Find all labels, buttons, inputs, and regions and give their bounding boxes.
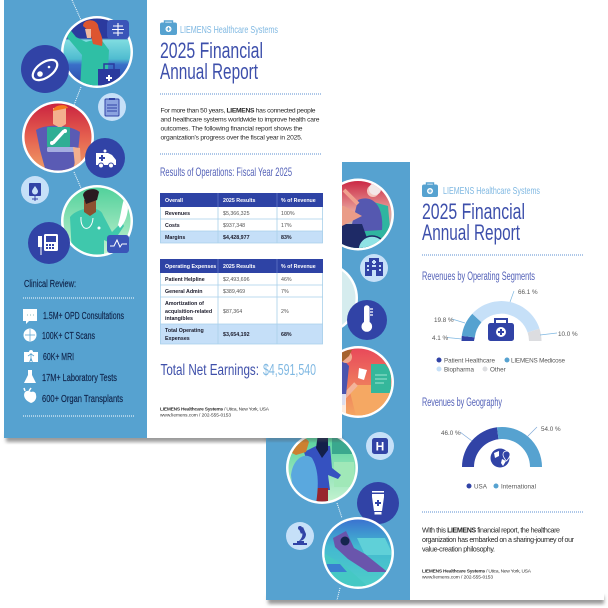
closing paragraph: With this LIEMENS financial report, the healthcare (422, 526, 560, 534)
title (422, 199, 525, 245)
table: overall results: $4,428,977 (223, 235, 250, 241)
illustration: folder and document (342, 346, 394, 418)
heading: geography: Revenues by Geography (422, 397, 502, 409)
table: operating expenses: Operating Expenses (165, 264, 216, 270)
icon: x-ray (107, 20, 129, 39)
icon: clipboard (98, 93, 126, 121)
table: overall results: Revenues (165, 211, 190, 217)
total net earnings: Total Net Earnings: (160, 362, 259, 379)
legend: geography (466, 484, 536, 490)
footer: www.liemens.com / 202-555-0153 (422, 574, 493, 580)
title: 2025 Financial (160, 38, 263, 63)
legend: geography: USA (474, 484, 488, 490)
legend: operating segments (436, 358, 565, 374)
icon: microscope (286, 522, 314, 550)
table: overall results: 83% (281, 235, 292, 241)
intro paragraph: outcomes. The following financial report shows the (160, 126, 303, 132)
icon: ointment tube (357, 482, 399, 524)
icon: ambulance (85, 138, 125, 178)
footer: LIEMENS Healthcare Systems / Utica, New York, USA (160, 406, 270, 412)
table: overall results: 17% (281, 223, 292, 229)
page shadows (6, 434, 604, 604)
chart: revenues by operating segments: 10.0 % (558, 331, 578, 338)
icon: infusion monitor (28, 222, 70, 264)
list: clinical statistics: 1.5M+ OPD Consultations (43, 311, 124, 322)
table: operating expenses: $87,364 (223, 309, 242, 315)
illustration: doctor with stethoscope (61, 185, 133, 257)
icon: speech bubble (23, 309, 37, 324)
table: overall results: % of Revenue (281, 198, 316, 204)
table: operating expenses: 46% (281, 277, 292, 283)
title: Annual Report (160, 59, 258, 84)
icon: hospital (360, 254, 388, 282)
brand header: LIEMENS Healthcare Systems (443, 185, 540, 197)
icon: flask (24, 370, 36, 383)
table: operating expenses: acquisition-related (165, 309, 212, 315)
table: operating expenses: Patient Helpline (165, 277, 205, 283)
table: overall results: Costs (165, 223, 180, 229)
icon: heartbeat chart (107, 235, 129, 253)
table: operating expenses: 2% (281, 309, 289, 315)
list: clinical statistics: 600+ Organ Transplants (42, 394, 123, 405)
intro paragraph: organization's progress over the fiscal year in 2025. (160, 134, 303, 142)
icon: thermometer (347, 300, 387, 340)
legend: operating segments: Patient Healthcare (444, 358, 495, 364)
illustration: pale circle (286, 262, 358, 334)
heading: results of operations: Results of Operations: Fiscal Year 2025 (160, 165, 292, 179)
table: overall results: $5,366,325 (223, 211, 250, 217)
icon: H sign: H (376, 440, 384, 454)
table: operating expenses: Amortization of (165, 301, 204, 307)
brand header (422, 183, 540, 197)
table: operating expenses: Total Operating (165, 328, 204, 334)
table: operating expenses: $2,493,696 (223, 277, 250, 283)
chart: revenues by operating segments: 66.1 % (518, 289, 538, 296)
chart: revenues by operating segments (432, 289, 578, 342)
title: Annual Report (422, 220, 520, 245)
table: overall results: Overall (165, 198, 183, 204)
table: overall results (160, 193, 323, 243)
heading: clinical review: Clinical Review: (24, 279, 76, 290)
illustration: patient lying down (322, 517, 394, 590)
table: overall results: 100% (281, 211, 295, 217)
table: operating expenses: 68% (281, 332, 292, 338)
table: overall results: $937,348 (223, 223, 245, 229)
legend: geography: International (501, 484, 536, 490)
panel: back page blue sidebar (266, 162, 410, 600)
illustration: doctor with medical bag (61, 16, 133, 88)
illustration: couple at doctor (286, 432, 358, 504)
legend: operating segments: LIEMENS Medicose (511, 358, 565, 364)
icon: germ (21, 45, 69, 93)
panel: front page financial report (4, 0, 342, 438)
icon: H sign (366, 432, 394, 460)
footer: LIEMENS Healthcare Systems / Utica, New York, USA (422, 568, 532, 574)
table: overall results: 2025 Results (223, 198, 255, 204)
icon: medical kit (422, 183, 438, 197)
heading: operating segments: Revenues by Operating Segments (422, 271, 535, 283)
panel: front page blue sidebar (4, 0, 147, 438)
list: clinical statistics: 60K+ MRI (43, 352, 74, 363)
title: 2025 Financial (422, 199, 525, 224)
list: clinical statistics: 100K+ CT Scans (42, 331, 95, 342)
brand header (160, 21, 278, 36)
table: operating expenses: General Admin (165, 289, 202, 295)
closing paragraph: organization has embarked on a sharing-journey of our (422, 536, 575, 544)
table: operating expenses: Expenses (165, 336, 190, 342)
icon: blood bag (21, 176, 49, 204)
table: operating expenses: % of Revenue (281, 264, 316, 270)
icon: heart organ (24, 388, 36, 403)
list: clinical statistics (23, 309, 124, 405)
footer: www.liemens.com / 202-555-0153 (160, 412, 231, 418)
legend: operating segments: Other (490, 366, 506, 374)
icon: medical kit (160, 21, 177, 35)
icon: MRI body (24, 350, 38, 364)
icon: medical kit (488, 319, 514, 341)
footer (160, 406, 270, 418)
closing paragraph: value-creation philosophy. (422, 546, 495, 554)
chart: revenues by operating segments: 4.1 % (432, 335, 449, 342)
intro paragraph (160, 108, 320, 142)
footer (422, 568, 532, 580)
table: operating expenses: intangibles (165, 316, 193, 322)
total net earnings: $4,591,540 (263, 362, 316, 379)
table: operating expenses: $3,654,192 (223, 332, 250, 338)
legend: operating segments: Biopharma (444, 366, 474, 374)
intro paragraph: and healthcare systems worldwide to improve health care (160, 116, 320, 124)
chart: revenues by geography (441, 426, 561, 468)
intro paragraph: For more than 50 years, LIEMENS has connected people (160, 108, 316, 114)
chart: revenues by operating segments: 19.8 % (434, 317, 454, 324)
illustration: patient in wheelchair (342, 178, 394, 250)
shadow of front page over back page (266, 436, 342, 441)
table: operating expenses: 7% (281, 289, 289, 295)
table: operating expenses: 2025 Results (223, 264, 255, 270)
icon: brain (24, 328, 36, 342)
chart: revenues by geography: 54.0 % (541, 426, 561, 433)
brand header: LIEMENS Healthcare Systems (180, 24, 278, 36)
chart: revenues by geography: 46.0 % (441, 430, 461, 437)
table: operating expenses: $389,469 (223, 289, 245, 295)
table: operating expenses (160, 259, 323, 344)
closing paragraph (422, 526, 575, 554)
icon: globe with pin (490, 448, 510, 468)
illustration: doctor with x-ray (22, 101, 94, 173)
table: overall results: Margins (165, 235, 185, 241)
panel: back page revenue report (266, 162, 604, 600)
list: clinical statistics: 17M+ Laboratory Tests (42, 373, 117, 384)
title (160, 38, 263, 84)
